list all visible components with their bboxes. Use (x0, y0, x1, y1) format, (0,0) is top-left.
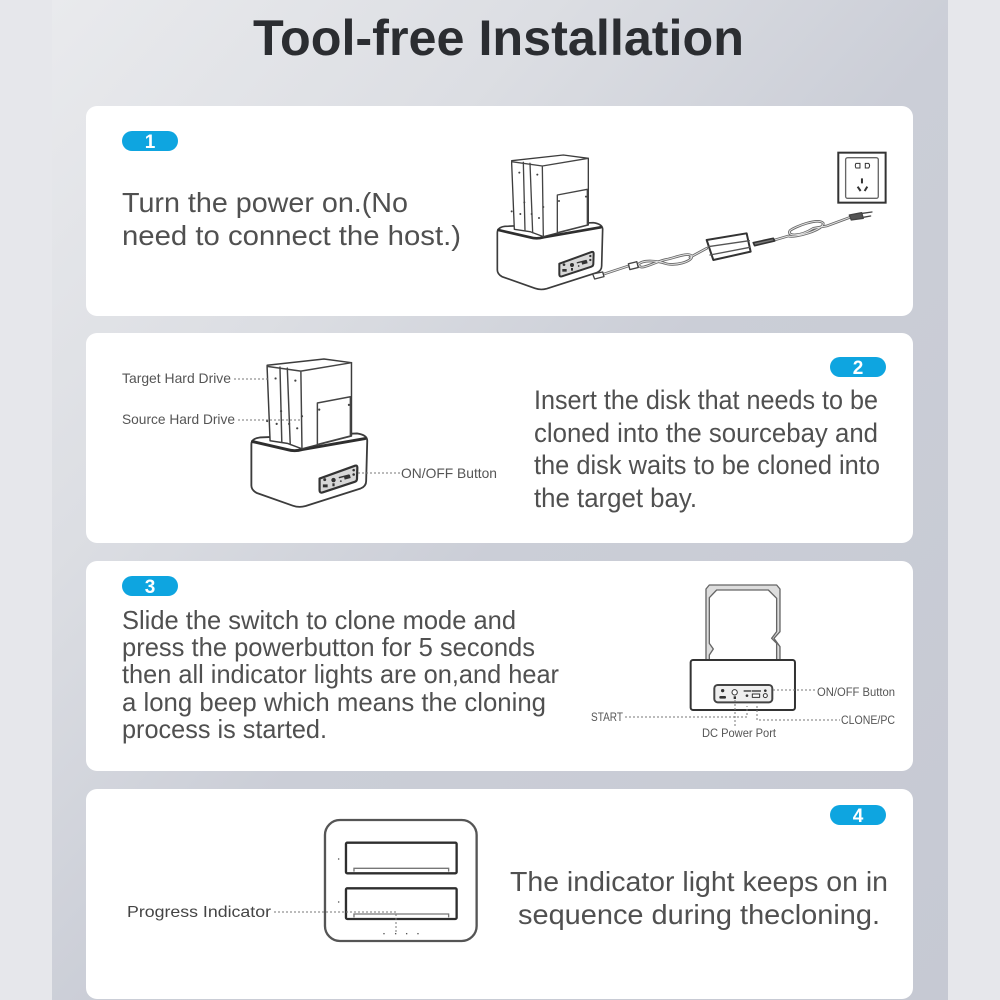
card 4 background (86, 789, 913, 999)
label: clone/pc (757, 706, 895, 727)
panel: step 2 (86, 333, 913, 543)
badge 3: 3 (145, 577, 155, 598)
illustration: power cable and adapter (593, 212, 872, 279)
dock body (691, 660, 795, 710)
badge 2: 2 (853, 358, 863, 379)
step 4 text: sequence during thecloning. (518, 899, 880, 930)
badge 3 (122, 576, 178, 598)
illustration: dock front view (691, 585, 795, 711)
badge 1 (122, 131, 178, 153)
icon: wall socket (838, 153, 886, 203)
step 1 text (122, 187, 461, 251)
label: source hard drive: Source Hard Drive (122, 411, 235, 427)
badge 4: 4 (853, 806, 864, 827)
illustration: dock with labelled drives (251, 359, 367, 507)
label: dc power port: DC Power Port (702, 726, 777, 740)
badge 1: 1 (145, 132, 156, 153)
step 2 text: cloned into the sourcebay and (534, 418, 878, 448)
step 2 text: the target bay. (534, 483, 697, 513)
panel: step 1 (86, 106, 913, 316)
panel: step 3 (86, 561, 913, 771)
step 3 text: press the powerbutton for 5 seconds (122, 632, 535, 662)
step 4 text: The indicator light keeps on in (510, 866, 888, 897)
step 4 text (510, 866, 888, 930)
step 1 text: Turn the power on.(No (122, 187, 408, 218)
card 1 background (86, 106, 913, 316)
label: on/off button (358, 465, 497, 481)
step 2 text: Insert the disk that needs to be (534, 385, 878, 415)
label: start: START (591, 710, 624, 724)
step 3 text: Slide the switch to clone mode and (122, 605, 516, 635)
step 3 text: process is started. (122, 714, 327, 744)
title: Tool-free Installation (253, 10, 744, 66)
label: on/off button (773, 685, 895, 699)
panel: step 4 (86, 789, 913, 999)
label: target hard drive: Target Hard Drive (122, 370, 231, 386)
step 2 text: the disk waits to be cloned into (534, 450, 880, 480)
illustration: dock with drives (497, 155, 603, 289)
label: start (591, 706, 747, 724)
card 3 background (86, 561, 913, 771)
hard drive outline (706, 585, 780, 660)
card 2 background (86, 333, 913, 543)
label: dc power port (702, 700, 777, 740)
step 3 text: then all indicator lights are on,and hear (122, 659, 559, 689)
label: clone/pc: CLONE/PC (841, 713, 895, 727)
label: on/off button: ON/OFF Button (817, 685, 895, 699)
port panel (714, 685, 772, 702)
label: progress indicator (127, 904, 396, 934)
step 3 text (122, 605, 559, 744)
step 1 text: need to connect the host.) (122, 220, 461, 251)
label: on/off button: ON/OFF Button (401, 465, 497, 481)
illustration: dock top view (325, 820, 477, 941)
badge 4 (830, 805, 886, 827)
label: progress indicator: Progress Indicator (127, 904, 272, 921)
badge 2 (830, 357, 886, 379)
step 3 text: a long beep which means the cloning (122, 687, 546, 717)
step 2 text (534, 385, 880, 513)
